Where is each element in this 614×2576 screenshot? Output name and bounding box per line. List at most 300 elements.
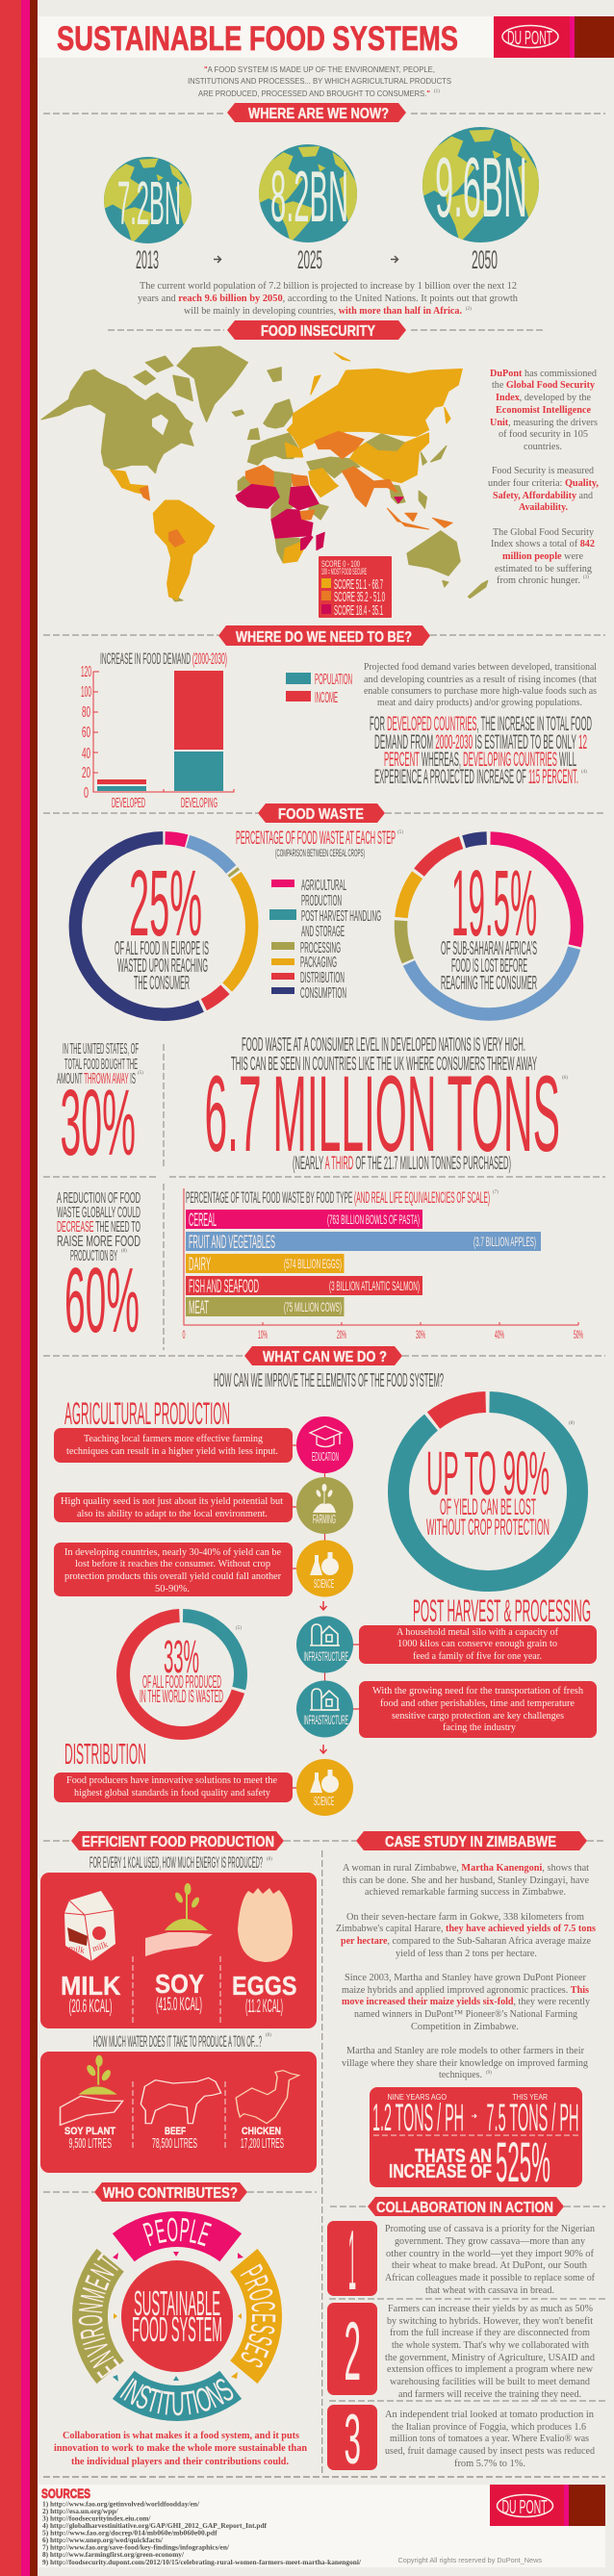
box: education: Teaching local farmers more effective farming (84, 1434, 264, 1444)
title band (38, 16, 494, 58)
segment: people: PEOPLE (142, 2217, 212, 2246)
section heading: what can we do: WHAT CAN WE DO ? (263, 1349, 387, 1365)
text: TOTAL FOOD BOUGHT THE (64, 1057, 138, 1073)
legend: waste steps: PROCESSING (300, 940, 341, 956)
icon: milk carton: milk (91, 1939, 110, 1953)
box: transportation: food and other perishables, time and temperature (380, 1698, 575, 1709)
collaboration item 1: that wheat with cassava in bread. (425, 2285, 554, 2296)
case study text: A woman in rural Zimbabwe, Martha Kanengoni, shows that (343, 1863, 589, 1874)
box: metal silo (359, 1625, 597, 1664)
map legend: 100 = MOST FOOD SECURE (321, 567, 367, 576)
y axis labels: 80 (82, 704, 90, 721)
x axis labels: 0 (183, 1328, 186, 1341)
label: soy (155, 1969, 204, 2015)
case study text: move increased their maize yields six-fold, they were recently (342, 1997, 591, 2007)
case study text: Competition in Zimbabwe. (411, 2022, 519, 2032)
panel: water footprint (40, 2052, 317, 2173)
globe 2050 (422, 127, 539, 242)
sources list: 9) http://foodsecurity.dupont.com/2012/10/15/celebrating-rural-women-farmers-meet-martha-kanengoni/ (42, 2558, 362, 2566)
case study text: per hectare, compared to the Sub-Saharan Africa average maize (341, 1936, 591, 1947)
label: beef (152, 2126, 197, 2152)
icon: soy plant in hand (145, 1883, 213, 1956)
arrow down (320, 1601, 327, 1610)
bar chart: increase in food demand: 100 (81, 684, 91, 701)
x axis labels: 30% (416, 1328, 425, 1341)
collaboration item 1 (327, 2212, 596, 2308)
donut: up to 90% yield loss: (8) (569, 1421, 575, 1426)
population paragraph (138, 281, 519, 317)
section heading: collaboration in action (330, 2197, 605, 2216)
section heading: food insecurity: FOOD INSECURITY (261, 323, 376, 340)
label: soy plant: 9,500 LITRES (69, 2135, 112, 2152)
box: transportation: sensitive cargo protection are key challenges (392, 1711, 564, 1722)
collaboration item 2 (327, 2303, 596, 2400)
text: SCORE 35.2 - 51.0 (334, 589, 385, 605)
diagram: sustainable food system: SUSTAINABLE (134, 2283, 220, 2323)
chart subtitle: (5) (397, 830, 403, 835)
icon: infrastructure second (296, 1680, 353, 1738)
box: science: lost before it reaches the consumer. Without crop (75, 1559, 270, 1569)
text: SCORE 18.4 - 35.1 (334, 602, 383, 619)
bars (97, 786, 146, 791)
sources heading: SOURCES (41, 2486, 90, 2501)
years timeline: 2013 (136, 245, 159, 274)
segment: environment: ENVIRONMENT (79, 2253, 119, 2379)
collaboration item 2: and farmers will receive the training they need. (398, 2389, 581, 2400)
food security text: from chronic hunger. (497, 575, 580, 586)
label: milk: MILK (61, 1971, 121, 2001)
box: metal silo: 1000 kilos can conserve enough grain to (397, 1639, 557, 1649)
icon: education (296, 1416, 353, 1473)
segment: processes: PROCESSES (241, 2263, 275, 2367)
years timeline: 2025 (297, 245, 322, 274)
food security text: million people were (502, 551, 583, 562)
callout: US 30%: (5) (138, 1071, 143, 1076)
legend: waste steps: AGRICULTURAL (301, 878, 346, 894)
globe 2025 (259, 144, 357, 242)
map legend: SCORE 0 - 100 (321, 559, 360, 569)
food security text: Unit, measuring the drivers (490, 418, 598, 428)
icon: science distribution (296, 1759, 353, 1816)
text: POST HARVEST HANDLING (301, 908, 381, 925)
panel: water footprint: 78,500 LITRES (152, 2135, 197, 2152)
icon: farming: FARMING (313, 1512, 336, 1526)
collaboration item 2: by switching to hybrids. However, they won't benefit (387, 2316, 593, 2327)
box: farming: High quality seed is not just about its yield potential but (61, 1496, 283, 1507)
box: education (54, 1428, 293, 1463)
text: 60% (64, 1249, 140, 1352)
population paragraph: years and reach 9.6 billion by 2050, according to the United Nations. It points out that growth (138, 293, 519, 304)
box: education: techniques can result in a higher yield with less input. (66, 1446, 278, 1457)
y axis labels (81, 664, 91, 802)
x axis labels: 40% (495, 1328, 504, 1341)
label: eggs (232, 1971, 296, 2017)
case study text: (9) (486, 2071, 492, 2076)
chart title: INCREASE IN FOOD DEMAND (2000-2030) (100, 650, 227, 668)
panel: water footprint: 17,200 LITRES (241, 2135, 284, 2152)
label: milk: (20.6 KCAL) (69, 1997, 112, 2017)
section heading: who contributes: WHO CONTRIBUTES? (103, 2185, 238, 2202)
intro quote: (1) (434, 89, 440, 94)
box: transportation (359, 1681, 597, 1738)
bar: meat (186, 1297, 345, 1318)
section heading: where are we now (43, 103, 605, 122)
label: soy: SOY (155, 1969, 204, 1999)
bar: cereal (186, 1210, 422, 1231)
food security text: DuPont has commissioned (490, 369, 598, 379)
box: transportation: facing the industry (443, 1722, 517, 1733)
diagram: sustainable food system (71, 2211, 283, 2421)
food security text: Index shows a total of 842 (491, 539, 595, 549)
collaboration statement: Collaboration is what makes it a food system, and it puts (63, 2431, 299, 2441)
legend: waste steps: PACKAGING (300, 955, 337, 971)
section headings: efficient food production and case study: CASE STUDY IN ZIMBABWE (385, 1834, 556, 1850)
bar chart: waste by food type: (75 MILLION COWS) (284, 1299, 342, 1314)
chart subtitle: (COMPARISON BETWEEN CEREAL CROPS) (275, 848, 365, 859)
demand paragraph: and developing countries as a result of rising incomes (that (364, 675, 597, 685)
bar chart: waste by food type: (3 BILLION ATLANTIC SALMON) (329, 1278, 420, 1293)
food security text: the Global Food Security (492, 380, 596, 391)
bar: cereal: CEREAL (189, 1211, 217, 1231)
y axis labels: 60 (82, 725, 90, 741)
population paragraph: The current world population of 7.2 billion is projected to increase by 1 billion over the next 12 (140, 281, 517, 292)
section heading: where do we need to be (43, 625, 605, 646)
text: INFRASTRUCTURE (304, 1648, 348, 1664)
bar: fruit and vegetables: FRUIT AND VEGETABLES (189, 1233, 275, 1253)
icon: cow outline (141, 2078, 221, 2124)
text: POPULATION (315, 672, 352, 688)
collaboration item 3: 3 (345, 2401, 361, 2479)
segment: institutions: INSTITUTIONS (119, 2378, 233, 2415)
bar chart: increase in food demand: DEVELOPING (181, 795, 217, 811)
food security text: Availability. (519, 502, 568, 513)
collaboration item 3: the Italian province of Foggia, which produces 1.6 (392, 2422, 586, 2433)
collaboration item 2: warehousing facilities will be built to meet demand (390, 2377, 591, 2387)
collaboration item 3: million tons of tomatoes a year. Where Evalio® was (390, 2434, 589, 2444)
donut: up to 90% yield loss (398, 1402, 577, 1581)
icon: soy plant outline (61, 2055, 123, 2125)
text: WASTE GLOBALLY COULD (57, 1205, 141, 1221)
connectors (293, 1445, 359, 1788)
box: metal silo: feed a family of five for one year. (413, 1651, 542, 1662)
donut: Europe 25%: WASTED UPON REACHING (117, 956, 208, 977)
bar chart: waste by food type: (574 BILLION EGGS) (284, 1256, 342, 1271)
bar: meat: MEAT (189, 1298, 209, 1318)
bar chart: waste by food type: (7) (493, 1190, 499, 1195)
developed vs developing statement (370, 713, 592, 788)
food security text: countries. (524, 442, 562, 452)
food security text: The Global Food Security (493, 527, 595, 538)
text: A REDUCTION OF FOOD (57, 1190, 141, 1207)
label: soy plant: SOY PLANT (64, 2126, 115, 2137)
section headings: efficient food production and case study (43, 1831, 605, 1850)
population paragraph: will be mainly in developing countries, with more than half in Africa. (184, 306, 462, 317)
label: beef: BEEF (165, 2126, 186, 2137)
food security text (488, 369, 599, 586)
collaboration item 3 (327, 2401, 596, 2479)
icon: science: SCIENCE (314, 1576, 334, 1591)
title: SUSTAINABLE FOOD SYSTEMS (57, 20, 458, 58)
panel: yield increase: NINE YEARS AGO (387, 2093, 447, 2102)
icon: infrastructure (296, 1617, 353, 1672)
icon: chicken outline (236, 2071, 299, 2124)
bar chart: increase in food demand: DEVELOPED (112, 795, 145, 811)
text: DISTRIBUTION (64, 1737, 146, 1771)
food security text: Safety, Affordability and (493, 491, 594, 501)
sources list: 5) http://www.fao.org/docrep/014/mb060e/mb060e00.pdf (42, 2529, 217, 2537)
case study text: named winners in DuPont™ Pioneer®'s National Farming (354, 2009, 578, 2020)
chart legend (286, 672, 352, 706)
globe 2013 (104, 157, 192, 243)
section heading: where do we need to be: WHERE DO WE NEED TO BE? (236, 629, 412, 646)
collaboration item 1: their wheat to make bread. At DuPont, our South (392, 2260, 588, 2271)
donut: Europe 25%: THE CONSUMER (134, 973, 190, 994)
legend: waste steps (269, 878, 381, 1002)
DuPont logo (494, 16, 614, 58)
collaboration item 2: extension offices to implement a program where new (387, 2364, 593, 2375)
demand paragraph: Projected food demand varies between developed, transitional (364, 662, 597, 673)
case study text: Zimbabwe's capital Harare, they have achieved yields of 7.5 tons (336, 1924, 596, 1934)
bar: dairy: DAIRY (189, 1255, 211, 1275)
text: 50% (574, 1328, 583, 1341)
years timeline (136, 245, 498, 274)
case study text (336, 1863, 596, 2080)
donut: 33% wasted: (5) (236, 1626, 242, 1631)
collaboration item 1: 1 (348, 2212, 356, 2308)
icon: education: EDUCATION (312, 1449, 339, 1464)
food security text: estimated to be suffering (495, 564, 593, 574)
collaboration item 2: Farmers can increase their yields by as much as 50% (388, 2304, 593, 2314)
panel: yield increase: INCREASE OF (389, 2161, 492, 2182)
text: 7.2BN (117, 168, 181, 238)
bar chart: waste by food type (183, 1188, 583, 1341)
icon: egg (238, 1888, 293, 1962)
sources list: 4) http://globalharvestinitiative.org/GAP/GHI_2012_GAP_Report_Int.pdf (42, 2521, 268, 2530)
case study text: this can be done. She and her husband, Stanley Dzingayi, have (343, 1875, 589, 1886)
collaboration item 1: government. They grow cassava—more than any (395, 2236, 586, 2247)
demand paragraph: meat and dairy products) and/or growing populations. (377, 698, 582, 708)
text: 8.2BN (270, 156, 348, 237)
sources list: 2) http://esa.un.org/wpp/ (42, 2507, 119, 2515)
legend: waste steps: DISTRIBUTION (300, 970, 345, 986)
case study text: village where they share their knowledge on improved farming (342, 2058, 589, 2069)
chart subtitle (236, 829, 403, 859)
case study text: achieved remarkable farming success in Zimbabwe. (365, 1887, 566, 1898)
food security text: Economist Intelligence (496, 405, 591, 416)
food security text: of food security in 105 (499, 429, 588, 440)
bar chart: increase in food demand: 120 (81, 664, 91, 680)
arrow down (320, 1745, 327, 1753)
donut: Europe 25% (75, 838, 252, 1014)
legend: waste steps: AND STORAGE (301, 924, 345, 940)
legend: waste steps: PRODUCTION (301, 893, 342, 909)
collaboration item 1: Promoting use of cassava is a priority for the Nigerian (385, 2224, 596, 2234)
developed vs developing statement: (4) (581, 770, 587, 775)
box: farming (54, 1492, 293, 1522)
case study text: yield of less than 2 tons per hectare. (396, 1949, 537, 1959)
callout: reduction 60%: RAISE MORE FOOD (57, 1234, 141, 1250)
label: eggs: (11.2 KCAL) (245, 1997, 283, 2017)
world map (41, 346, 488, 601)
x axis labels: 20% (337, 1328, 346, 1341)
box: science: 50-90%. (155, 1584, 190, 1594)
legend: waste steps: CONSUMPTION (300, 985, 346, 1002)
section heading: collaboration in action: COLLABORATION IN ACTION (376, 2200, 553, 2216)
panel: yield increase (370, 2087, 582, 2194)
text: IN THE WORLD IS WASTED (140, 1687, 223, 1706)
box: science: protection products this overall yield could fall another (64, 1571, 281, 1582)
donut: 33% wasted (123, 1616, 242, 1733)
sources list: 3) http://foodsecurityindex.eiu.com/ (42, 2513, 151, 2523)
collaboration item 3: used, fruit damage caused by insect pests was reduced (385, 2446, 596, 2457)
text: AGRICULTURAL PRODUCTION (64, 1396, 230, 1431)
intro quote: "A FOOD SYSTEM IS MADE UP OF THE ENVIRONMENT, PEOPLE, (204, 64, 435, 74)
icon: farming (296, 1477, 353, 1534)
intro quote: ARE PRODUCED, PROCESSED AND BROUGHT TO CONSUMERS." (198, 89, 430, 98)
section heading: food waste (43, 803, 605, 823)
bar chart: waste by food type: (763 BILLION BOWLS OF PASTA) (327, 1211, 420, 1227)
box: distribution: Food producers have innovative solutions to meet the (66, 1775, 277, 1786)
box: metal silo: A household metal silo with a capacity of (397, 1627, 558, 1638)
label: soy plant (64, 2126, 115, 2152)
callout: reduction 60% (57, 1190, 141, 1352)
collaboration item 1: other country in the world—yet they import 90% of (386, 2249, 594, 2259)
section heading: where are we now: WHERE ARE WE NOW? (248, 106, 389, 122)
box: transportation: With the growing need for the transportation of fresh (372, 1686, 584, 1696)
label: eggs: EGGS (232, 1971, 296, 2001)
callout: UK 6.7 million tons: (6) (562, 1076, 568, 1081)
donut: Europe 25%: 25% (129, 851, 202, 956)
collaboration statement: the individual players and their contributions could. (71, 2457, 289, 2467)
panel: yield increase: THIS YEAR (512, 2093, 548, 2102)
diagram: sustainable food system: FOOD SYSTEM (132, 2309, 222, 2349)
case study text: On their seven-hectare farm in Gokwe, 338 kilometers from (346, 1912, 584, 1923)
case study text: techniques. (439, 2070, 482, 2080)
collaboration statement (54, 2431, 307, 2467)
energy question: (8) (267, 1857, 272, 1862)
panel: energy produced: (415.0 KCAL) (156, 1995, 202, 2015)
x axis labels: 10% (258, 1328, 268, 1341)
label: milk (61, 1971, 121, 2017)
callout: US 30%: AMOUNT THROWN AWAY IS (57, 1071, 136, 1087)
panel: yield increase: THATS AN (415, 2146, 492, 2167)
x axis labels (183, 1328, 583, 1341)
icon: science (296, 1540, 353, 1597)
section heading: food waste: FOOD WASTE (278, 806, 364, 823)
text: SCORE 51.1 - 68.7 (334, 576, 383, 593)
collaboration item 3: An independent trial looked at tomato production in (385, 2410, 595, 2420)
copyright: Copyright All rights reserved by DuPont_News (398, 2556, 542, 2564)
section heading: food insecurity (108, 320, 545, 340)
demand paragraph: enable consumers to purchase more high-value foods such as (364, 686, 597, 697)
box: farming: also its ability to adapt to the local environment. (77, 1509, 268, 1519)
chart legend: INCOME (315, 690, 338, 706)
collaboration item 1: African colleagues made it possible to replace some of (385, 2273, 595, 2283)
text: 2050 (472, 245, 498, 274)
section heading: who contributes (43, 2182, 317, 2202)
text: FOR EVERY 1 KCAL USED, HOW MUCH ENERGY IS PRODUCED? (90, 1853, 263, 1872)
food security text: Index, developed by the (496, 393, 591, 403)
sources list: 8) http://www.farmingfirst.org/green-economy/ (42, 2550, 185, 2559)
section heading: what can we do (43, 1346, 605, 1365)
panel: energy produced (40, 1873, 317, 2028)
left colour stripes (0, 0, 38, 2576)
intro quote (188, 64, 451, 98)
y axis labels: 40 (82, 746, 90, 762)
food security text: under four criteria: Quality, (488, 478, 599, 489)
callout: reduction 60%: (8) (121, 1249, 127, 1254)
text: INFRASTRUCTURE (304, 1712, 348, 1727)
donut: 33% wasted: 33% (164, 1632, 199, 1683)
icon: milk carton: milk (68, 1943, 86, 1955)
population paragraph: (2) (466, 307, 472, 312)
y axis labels: 20 (82, 765, 90, 781)
sources list (42, 2500, 362, 2566)
water question: (8) (266, 2033, 271, 2038)
text: HOW MUCH WATER DOES IT TAKE TO PRODUCE A TON OF...? (93, 2032, 262, 2051)
collaboration item 2: 2 (345, 2306, 361, 2398)
bar: fruit and vegetables (186, 1232, 541, 1253)
y axis labels: 0 (84, 785, 89, 802)
map legend (319, 556, 392, 619)
text: 30% (60, 1070, 136, 1175)
bar: dairy (186, 1254, 345, 1275)
label: chicken (241, 2126, 284, 2152)
box: distribution: highest global standards in food quality and safety (74, 1788, 271, 1798)
intro quote: INSTITUTIONS AND PROCESSES... BY WHICH AGRICULTURAL PRODUCTS (188, 76, 451, 86)
icon: milk carton (64, 1891, 115, 1961)
centre circle (121, 2260, 233, 2372)
sources list: 6) http://www.unep.org/wed/quickfacts/ (42, 2536, 164, 2544)
food security text: (3) (583, 575, 589, 580)
callout: reduction 60%: DECREASE THE NEED TO (57, 1219, 141, 1236)
energy question (90, 1853, 272, 1872)
label: chicken: CHICKEN (242, 2126, 281, 2137)
callout: US 30% (57, 1041, 143, 1175)
water question (93, 2032, 271, 2051)
callout: reduction 60%: PRODUCTION BY (70, 1248, 117, 1264)
collaboration item 2: the government, Ministry of Agriculture, USAID and (385, 2353, 596, 2363)
DuPont logo footer: DU PONT (502, 2497, 547, 2518)
bar: fish and seafood: FISH AND SEAFOOD (189, 1277, 259, 1297)
food security text: Food Security is measured (492, 466, 595, 476)
sources list: 7) http://www.fao.org/save-food/key-findings/infographics/en/ (42, 2542, 230, 2552)
text: IN THE UNITED STATES, OF (63, 1041, 139, 1058)
box: science (54, 1543, 293, 1596)
bar chart: waste by food type: (3.7 BILLION APPLES) (473, 1234, 536, 1249)
DuPont logo footer (490, 2485, 605, 2526)
collaboration item 2: from the full increase if they are disconnected from (390, 2328, 590, 2338)
section headings: efficient food production and case study: EFFICIENT FOOD PRODUCTION (82, 1834, 274, 1850)
sources list: 1) http://www.fao.org/getinvolved/worldfoodday/en/ (42, 2500, 200, 2508)
collaboration item 2: the whole system. That's why we collaborated with (392, 2340, 590, 2351)
demand paragraph (364, 662, 597, 708)
small arrows (113, 2252, 243, 2382)
donut: Sub-Saharan Africa 19.5% (400, 838, 577, 1014)
collaboration statement: innovation to work to make the whole more sustainable than (54, 2443, 307, 2454)
DuPont logo: DU PONT (507, 28, 552, 49)
sources panel (38, 2485, 605, 2567)
box: distribution (54, 1773, 293, 1802)
donut: Europe 25%: OF ALL FOOD IN EUROPE IS (115, 938, 209, 959)
collaboration item 3: from 5.7% to 1%. (454, 2459, 525, 2469)
case study text: Martha and Stanley are role models to other farmers in their (346, 2046, 584, 2056)
box: science: In developing countries, nearly 30-40% of yield can be (64, 1547, 281, 1558)
text: OF ALL FOOD PRODUCED (142, 1672, 221, 1692)
case study text: Since 2003, Martha and Stanley have grown DuPont Pioneer (345, 1973, 586, 1983)
segment: people (112, 2211, 243, 2261)
case study text: maize hybrids and applied improved agronomic practices. This (342, 1985, 589, 1996)
